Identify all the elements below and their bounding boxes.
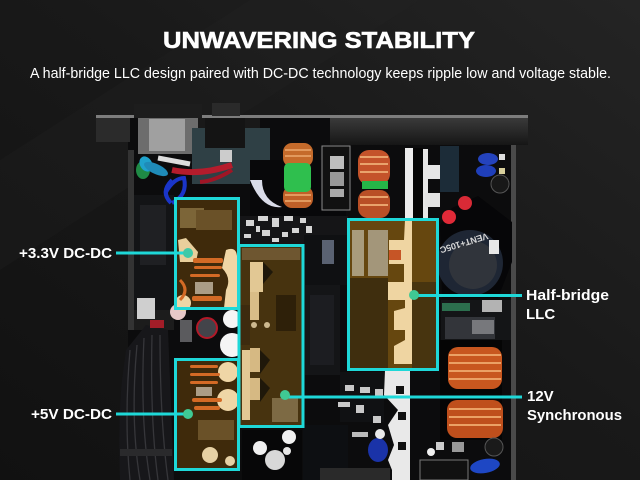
panel: 3.3V DC-DC highlighted region [175,199,238,311]
callout: Half-bridge LLC: Half-bridge [526,287,609,304]
wires: blue green [136,161,150,179]
white smd pads [244,216,312,242]
panel: 5V DC-DC highlighted region [175,360,239,469]
middle black component [305,285,340,375]
small choke green [283,143,313,167]
black cable bundle [119,325,174,480]
power supply board photo: VENT+105C [438,231,489,255]
callout: 12V Synchronous: 12V [527,388,554,405]
subtitle: A half-bridge LLC design paired with DC-DC technology keeps ripple low and voltage stable. [30,66,611,82]
white heatsink [405,148,413,220]
big choke [440,340,502,440]
board: small ic [322,146,350,210]
callout: +3.3V DC-DC: +3.3V DC-DC [19,245,112,262]
bottom white heatsink [384,370,410,480]
blue caps [478,153,498,165]
title: UNWAVERING STABILITY [163,27,475,53]
lower blue cap [469,457,501,475]
wire blue loop [166,178,185,203]
power supply board photo [96,103,528,480]
big capacitor [440,196,512,298]
red wires [172,165,232,172]
lower mid capacitors [242,430,302,480]
chassis [128,116,516,480]
callout: 12V Synchronous [280,388,622,424]
panel: half-bridge LLC highlighted region [350,220,437,369]
panel: 12V synchronous highlighted region [240,246,302,426]
top bar [330,115,528,145]
callout: Half-bridge LLC: LLC [526,306,555,323]
PCB left detail [134,195,174,310]
callout: +5V DC-DC [31,406,193,423]
callout: 12V Synchronous: Synchronous [527,407,622,424]
highlight boxes [176,198,438,470]
callout: +3.3V DC-DC [19,245,193,262]
area between dc boxes [170,304,186,320]
lower right [441,300,511,340]
dark square [440,146,459,192]
callout: Half-bridge LLC [409,287,609,323]
white wire [158,158,190,164]
callout: +5V DC-DC: +5V DC-DC [31,406,112,423]
small connector white [137,298,155,319]
power socket [138,118,198,154]
bottom connector [420,460,468,480]
right choke [358,150,390,185]
